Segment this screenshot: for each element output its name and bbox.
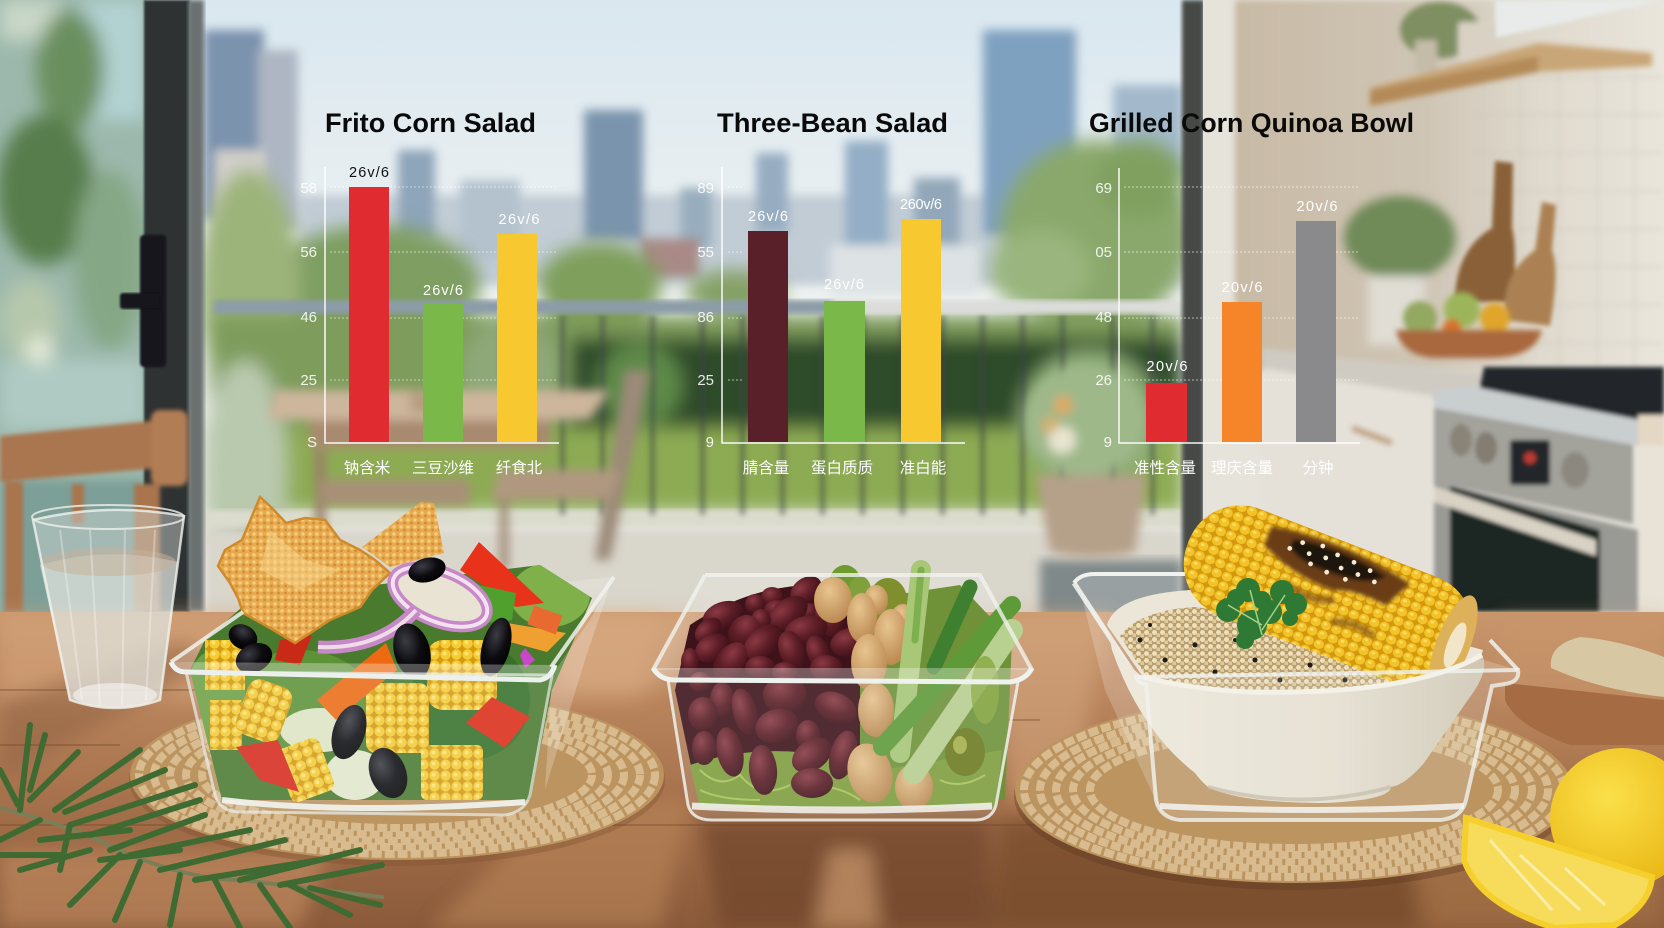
value labels: 26v/6 bbox=[824, 277, 864, 293]
title: Grilled Corn Quinoa Bowl bbox=[1089, 108, 1414, 138]
chart: Frito Corn Salad bbox=[300, 108, 559, 477]
y-axis labels: 25 bbox=[300, 372, 317, 389]
bars bbox=[1146, 221, 1336, 442]
y-axis labels: 55 bbox=[697, 244, 714, 261]
beans and greens bbox=[675, 585, 1012, 808]
chart: Three-Bean Salad bbox=[697, 108, 965, 477]
bars bbox=[349, 187, 537, 442]
y-axis labels: 56 bbox=[300, 244, 317, 261]
value labels: 26v/6 bbox=[498, 212, 540, 228]
upper cupboard bbox=[1495, 0, 1664, 38]
y-axis labels: 89 bbox=[697, 180, 714, 197]
planter with flowers bbox=[1025, 365, 1147, 557]
category labels bbox=[344, 459, 543, 477]
olives bbox=[830, 565, 860, 597]
category labels: 纤食北 bbox=[496, 459, 543, 477]
y-axis labels: 48 bbox=[1095, 309, 1112, 326]
value labels: 26v/6 bbox=[748, 209, 788, 225]
glass back bbox=[171, 577, 614, 667]
value labels: 260v/6 bbox=[900, 197, 942, 213]
value labels: 26v/6 bbox=[349, 165, 389, 181]
wooden chair bbox=[0, 410, 188, 612]
drinking glass bbox=[32, 505, 184, 708]
y-axis labels: 25 bbox=[697, 372, 714, 389]
bowl back rim bbox=[1107, 590, 1483, 690]
corn pieces bbox=[366, 683, 429, 753]
container: Frito corn salad bbox=[170, 497, 614, 815]
rosemary sprig bbox=[0, 725, 382, 928]
chart: Grilled Corn Quinoa Bowl bbox=[1089, 108, 1414, 477]
value labels: 20v/6 bbox=[1222, 280, 1262, 296]
y-axis labels: 58 bbox=[300, 180, 317, 197]
title: Frito Corn Salad bbox=[325, 108, 536, 138]
y-axis labels bbox=[300, 180, 317, 451]
category labels bbox=[743, 459, 946, 477]
value labels bbox=[1146, 199, 1338, 375]
kitchen plant bbox=[1344, 196, 1456, 345]
value labels: 20v/6 bbox=[1146, 359, 1188, 375]
value labels bbox=[748, 197, 942, 293]
y-axis labels: 69 bbox=[1095, 180, 1112, 197]
cutting boards bbox=[1455, 161, 1556, 326]
category labels: 准白能 bbox=[900, 459, 946, 477]
category labels: 分钟 bbox=[1302, 459, 1334, 477]
bowl front bbox=[1108, 630, 1484, 803]
y-axis labels: 86 bbox=[697, 309, 714, 326]
terrace deck bbox=[204, 528, 1184, 618]
background: kitchen bbox=[1182, 0, 1664, 620]
category labels: 钠含米 bbox=[344, 459, 390, 477]
y-axis labels: 9 bbox=[706, 434, 714, 451]
glass bbox=[653, 575, 1032, 670]
chickpeas bbox=[814, 577, 933, 810]
green onion stalks bbox=[882, 570, 1012, 773]
wooden table bbox=[0, 612, 1664, 928]
left window area bbox=[0, 0, 146, 620]
y-axis labels: 46 bbox=[300, 309, 317, 326]
grilled corn cob bbox=[1168, 489, 1490, 704]
value labels: 20v/6 bbox=[1296, 199, 1338, 215]
lemons bbox=[1464, 748, 1664, 928]
y-axis labels bbox=[1095, 180, 1112, 451]
category labels: 蛋白质质 bbox=[811, 459, 873, 477]
glass front bbox=[1136, 670, 1518, 820]
container: three-bean salad bbox=[653, 565, 1032, 820]
category labels: 准性含量 bbox=[1134, 459, 1196, 477]
category labels: 三豆沙维 bbox=[412, 459, 474, 477]
chips bbox=[362, 502, 444, 567]
wall shelf with plants bbox=[1370, 2, 1652, 106]
y-axis labels: 05 bbox=[1095, 244, 1112, 261]
placemat right bbox=[1014, 697, 1574, 890]
category labels bbox=[1134, 459, 1334, 477]
y-axis labels: 26 bbox=[1095, 372, 1112, 389]
window frame bbox=[120, 0, 204, 612]
counter and cabinet bbox=[1262, 348, 1640, 612]
salad mix bbox=[190, 565, 592, 800]
bars bbox=[748, 219, 941, 442]
stove bbox=[1434, 367, 1664, 612]
quinoa bbox=[1120, 607, 1420, 695]
y-axis labels bbox=[697, 180, 714, 451]
onion rings bbox=[384, 555, 496, 639]
title: Three-Bean Salad bbox=[717, 108, 948, 138]
y-axis labels: S bbox=[307, 434, 317, 451]
category labels: 理庆含量 bbox=[1211, 459, 1273, 477]
glass container back bbox=[1074, 574, 1518, 677]
glass front bbox=[171, 577, 614, 667]
black beans bbox=[406, 553, 448, 587]
container: grilled corn quinoa bowl bbox=[1074, 489, 1518, 820]
value labels bbox=[349, 165, 540, 299]
y-axis labels: 9 bbox=[1104, 434, 1112, 451]
parsley bbox=[1216, 578, 1307, 649]
terrace table and chairs bbox=[268, 370, 650, 570]
background: balcony view through window bbox=[0, 0, 1664, 640]
cutting board and napkin bbox=[1505, 637, 1664, 745]
value labels: 26v/6 bbox=[423, 283, 463, 299]
category labels: 腈含量 bbox=[743, 459, 789, 477]
fruit bowl bbox=[1396, 292, 1542, 358]
peppers bbox=[317, 643, 397, 720]
placemat left bbox=[129, 690, 665, 866]
